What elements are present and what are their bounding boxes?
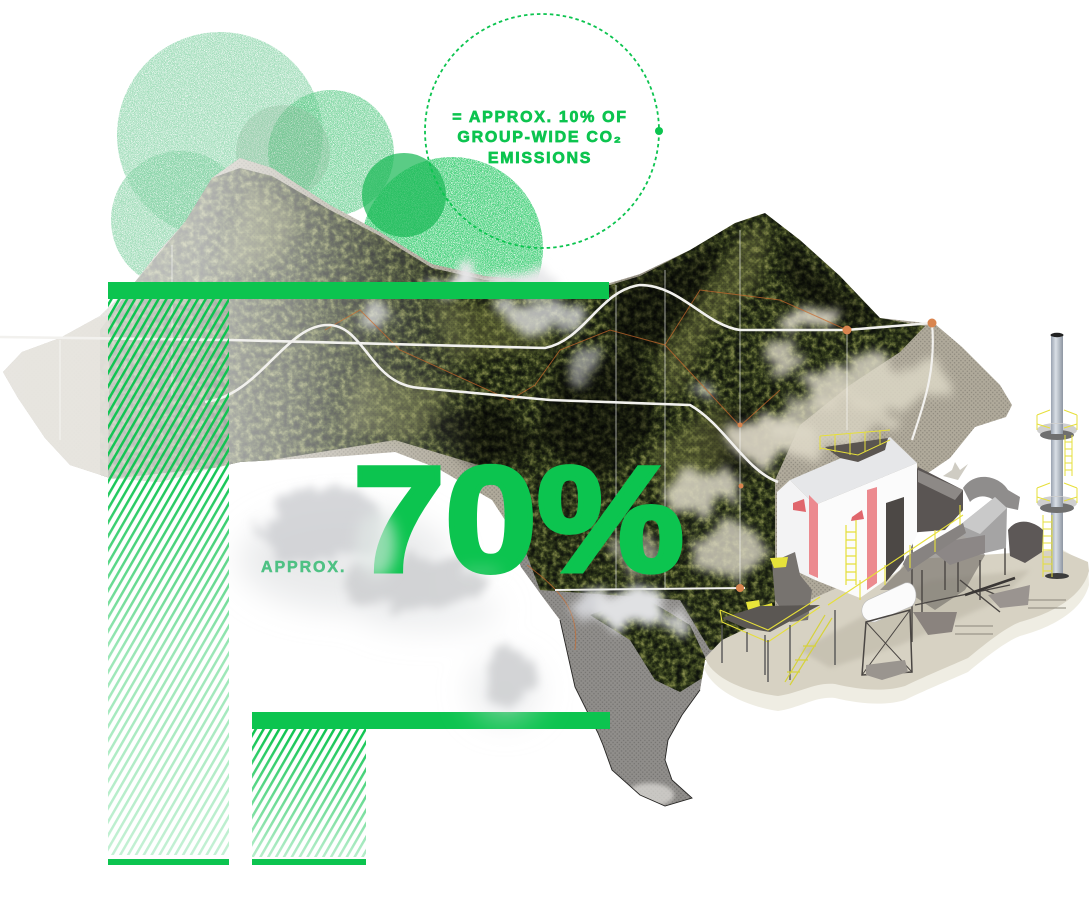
callout text: GROUP-WIDE CO₂ xyxy=(457,129,623,146)
exhaust stack xyxy=(1037,333,1077,579)
boiler house side xyxy=(815,463,917,598)
stack platforms xyxy=(1037,423,1077,437)
white route upper xyxy=(0,285,932,348)
side opening xyxy=(886,497,904,582)
bubble: upper right xyxy=(268,90,394,216)
ground shadow xyxy=(800,570,1030,668)
land base xyxy=(3,158,1012,690)
white route lower xyxy=(205,325,778,482)
map landmass xyxy=(0,150,1030,820)
second green bar xyxy=(252,712,610,729)
rear ducting xyxy=(963,477,1043,563)
hatched column left xyxy=(108,299,229,855)
stack rails and ladder xyxy=(1037,410,1077,577)
peninsula coast outline xyxy=(560,620,700,806)
cloud: top on mountain xyxy=(365,272,721,402)
base line left xyxy=(108,859,229,865)
main gallery rail xyxy=(828,505,963,605)
bubble: bottom right large xyxy=(361,157,543,339)
bubble: overlap middle xyxy=(236,105,330,199)
callout text: EMISSIONS xyxy=(488,150,592,167)
island top xyxy=(705,550,1089,696)
western fog fade xyxy=(0,150,480,490)
southern peninsula grey xyxy=(520,554,713,806)
orange thin lines xyxy=(325,290,847,650)
west land beige xyxy=(0,315,110,480)
logo marks xyxy=(793,499,864,521)
front platform xyxy=(720,597,835,685)
bubble: lower left xyxy=(111,151,249,289)
label: approx: APPROX. xyxy=(261,559,346,576)
halftone texture xyxy=(0,150,1030,820)
roof top platform xyxy=(820,430,890,462)
boiler house front xyxy=(777,480,815,580)
filter housing xyxy=(925,497,1007,565)
power plant xyxy=(704,333,1089,711)
base line right xyxy=(252,859,366,865)
south forest patch xyxy=(590,604,706,692)
white tank xyxy=(862,583,916,680)
discharge bins xyxy=(913,578,1066,635)
callout text xyxy=(452,109,628,167)
grey clouds below land xyxy=(240,487,540,722)
red stripe right xyxy=(867,487,877,590)
bubble: large xyxy=(117,32,323,238)
white cloud on peninsula xyxy=(572,587,696,643)
orange nodes xyxy=(736,318,936,592)
ring end dot xyxy=(655,127,663,135)
soft halo xyxy=(240,510,540,722)
forest area xyxy=(100,168,925,650)
cloud group: east beige xyxy=(612,307,955,574)
rear steel frame xyxy=(912,540,1020,642)
plant steam xyxy=(943,462,968,480)
boiler house roof xyxy=(790,437,917,505)
white route right xyxy=(912,323,933,440)
island base side xyxy=(704,548,1089,711)
cloud veil over the seven xyxy=(356,511,502,579)
conveyor gallery xyxy=(900,467,966,572)
dashed callout ring xyxy=(425,14,663,248)
green emission bubbles xyxy=(111,32,543,339)
top green bar xyxy=(108,282,609,299)
hatched column right xyxy=(252,729,366,857)
route lines xyxy=(0,230,936,650)
south tip light xyxy=(626,783,674,807)
forest sunlit ridges xyxy=(220,185,770,510)
forest shadows xyxy=(420,235,895,480)
red stripe left xyxy=(809,495,818,578)
big number 70%: 70% xyxy=(353,435,684,603)
cloud core xyxy=(263,487,532,703)
front feeder xyxy=(746,552,812,622)
structure under gallery xyxy=(880,530,985,610)
thin grid lines xyxy=(60,230,847,590)
building ladder xyxy=(846,520,856,585)
dashed circle xyxy=(425,14,659,248)
bubble: dark small xyxy=(362,153,446,237)
white route bottom xyxy=(555,588,745,590)
clouds on land xyxy=(365,272,955,574)
callout text: = APPROX. 10% OF xyxy=(452,109,628,126)
